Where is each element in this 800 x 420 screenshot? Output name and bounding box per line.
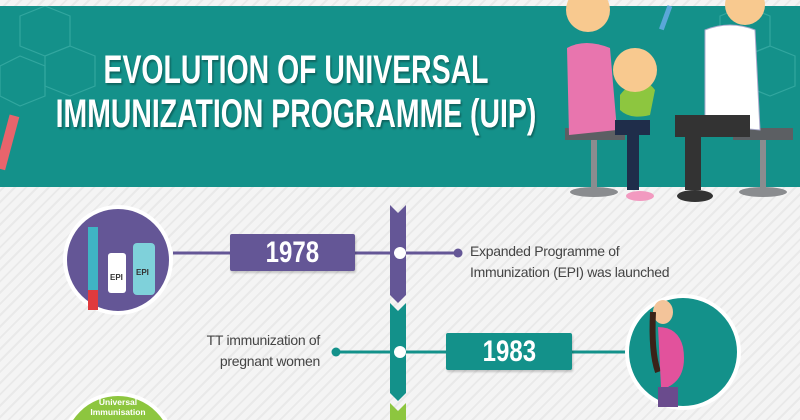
text: EPI launched: Expanded Programme of <box>470 243 619 259</box>
icon: EPI vials circle: EPI <box>110 273 123 282</box>
title: IMMUNIZATION PROGRAMME (UIP) <box>56 92 536 136</box>
banner <box>0 6 800 187</box>
event 1978 <box>63 205 669 315</box>
text: TT immunization: pregnant women <box>220 353 320 369</box>
connector lines <box>332 346 626 358</box>
year box 1983 <box>446 333 572 370</box>
icon: UIP green circle: Universal <box>99 397 137 407</box>
icon: pregnant woman circle <box>625 294 741 410</box>
icon: EPI vials circle: EPI <box>136 268 149 277</box>
title <box>56 48 537 138</box>
text: EPI launched: Immunization (EPI) was launched <box>470 264 669 280</box>
text: EPI launched <box>470 243 669 280</box>
illustration: mother, baby, doctor <box>565 0 793 202</box>
icon: UIP green circle <box>68 392 168 420</box>
text: TT immunization: TT immunization of <box>207 332 320 348</box>
title: EVOLUTION OF UNIVERSAL <box>104 48 488 92</box>
timeline spine <box>390 205 406 420</box>
year box 1978 <box>230 234 355 271</box>
event 1983 <box>206 294 741 410</box>
connector lines <box>173 247 462 259</box>
banner decoration: hexagons <box>0 6 796 106</box>
icon: EPI vials circle <box>63 205 173 315</box>
icon: UIP green circle: Immunisation <box>90 407 146 417</box>
year box 1983: 1983 <box>482 335 536 368</box>
year box 1978: 1978 <box>266 236 319 269</box>
icon: syringe left <box>0 114 20 170</box>
text: TT immunization <box>206 332 320 369</box>
